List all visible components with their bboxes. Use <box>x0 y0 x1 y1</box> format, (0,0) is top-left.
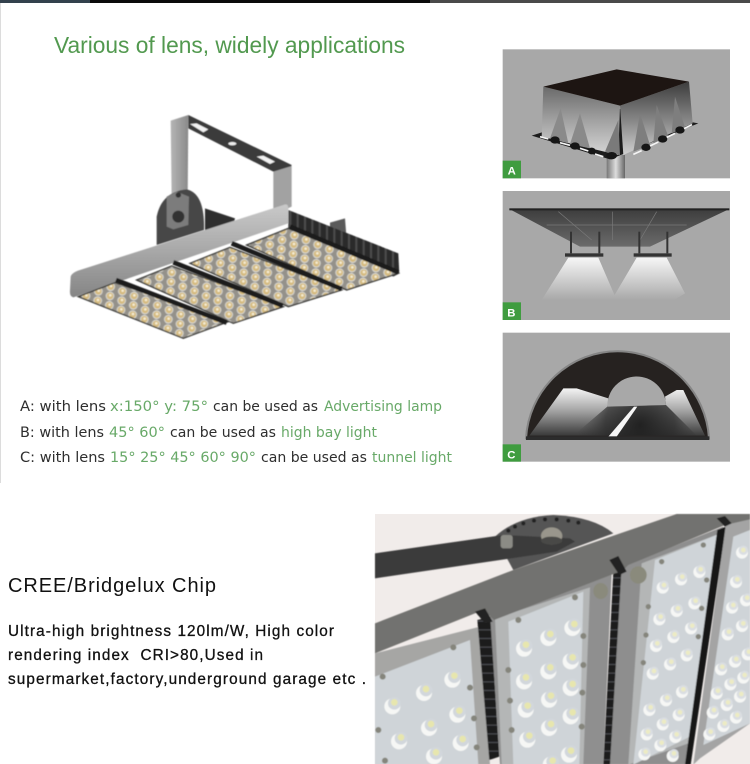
base line <box>526 436 709 440</box>
line B: high bay light <box>281 425 377 441</box>
chip heading: CREE/Bridgelux Chip <box>8 575 216 597</box>
line B: B: with lens <box>20 425 104 441</box>
dark fins 2 <box>603 572 622 764</box>
lit edges <box>540 125 692 157</box>
product close-up photo <box>375 514 750 764</box>
swivel plate <box>157 189 235 245</box>
pole <box>607 155 625 178</box>
line C: can be used as <box>261 450 367 466</box>
mounting disc <box>495 515 613 570</box>
module 1 <box>375 627 490 764</box>
module 2 <box>490 573 612 764</box>
panel screws <box>375 542 709 764</box>
bracket <box>171 115 292 215</box>
badge C <box>503 444 521 462</box>
top face <box>543 69 689 106</box>
panel A: advertising lamp <box>503 49 730 178</box>
line C: tunnel light <box>372 450 452 466</box>
base plate <box>532 108 698 159</box>
bolts <box>501 527 562 548</box>
line A: Advertising lamp <box>324 399 442 415</box>
mounting arm <box>375 535 575 578</box>
badge B <box>503 302 521 320</box>
module separators <box>116 227 398 323</box>
line B <box>20 425 377 441</box>
lens legend <box>20 399 452 466</box>
ceiling <box>509 208 729 247</box>
heat sink <box>288 210 399 277</box>
product image: LED flood light <box>70 115 399 338</box>
chip description: supermarket,factory,underground garage etc . <box>8 671 366 688</box>
badge C: C <box>507 449 515 461</box>
panel B: high bay light <box>503 191 730 320</box>
lamps <box>565 232 672 257</box>
road shadow <box>573 405 697 436</box>
front rail <box>70 204 288 297</box>
light box walls <box>542 82 693 155</box>
dark fins 3 <box>685 527 726 764</box>
disc holes <box>506 517 580 533</box>
line C: 15° 25° 45° 60° 90° <box>110 450 256 466</box>
lit tunnel interior <box>529 388 705 436</box>
dark fins 1 <box>477 617 499 760</box>
panel C: tunnel light <box>503 333 730 462</box>
large screws <box>593 566 647 599</box>
top image strip <box>0 0 750 3</box>
base scallops <box>550 126 685 159</box>
module 3 <box>610 527 723 764</box>
chip description <box>8 623 366 688</box>
tunnel arch <box>526 351 709 438</box>
line B: can be used as <box>170 425 276 441</box>
road stripe <box>608 407 637 437</box>
line A: A: with lens <box>20 399 106 415</box>
tunnel opening <box>607 376 666 407</box>
line A: x:150° y: 75° <box>110 399 208 415</box>
badge A <box>503 161 521 178</box>
badge A: A <box>508 166 516 178</box>
line C: C: with lens <box>20 450 105 466</box>
title: Various of lens, widely applications <box>54 32 405 58</box>
badge B: B <box>507 308 515 320</box>
line A <box>20 399 442 415</box>
chip description: Ultra-high brightness 120lm/W, High color <box>8 623 334 640</box>
left edge line <box>0 3 1 483</box>
line C <box>20 450 452 466</box>
module 4 <box>693 517 750 764</box>
line A: can be used as <box>213 399 318 415</box>
line B: 45° 60° <box>109 425 165 441</box>
top rail <box>375 514 750 653</box>
LED modules <box>78 228 398 338</box>
rail notches <box>475 516 732 623</box>
light beams <box>542 258 685 300</box>
chip description: rendering index CRI>80,Used in <box>8 647 263 664</box>
